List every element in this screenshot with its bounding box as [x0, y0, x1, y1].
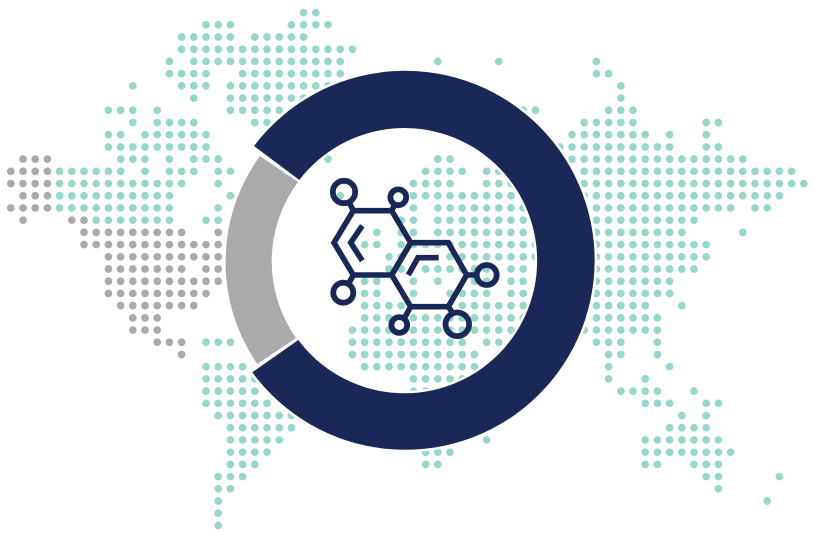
connectors	[349, 203, 476, 317]
navy ring segment	[252, 71, 595, 450]
grey highlighted dots	[11, 159, 218, 354]
inner bonds	[351, 226, 439, 275]
icon: molecule	[333, 181, 497, 336]
grey ring segment	[226, 156, 298, 364]
right hexagon	[392, 243, 467, 307]
left hexagon	[334, 211, 411, 275]
atoms	[333, 181, 355, 203]
